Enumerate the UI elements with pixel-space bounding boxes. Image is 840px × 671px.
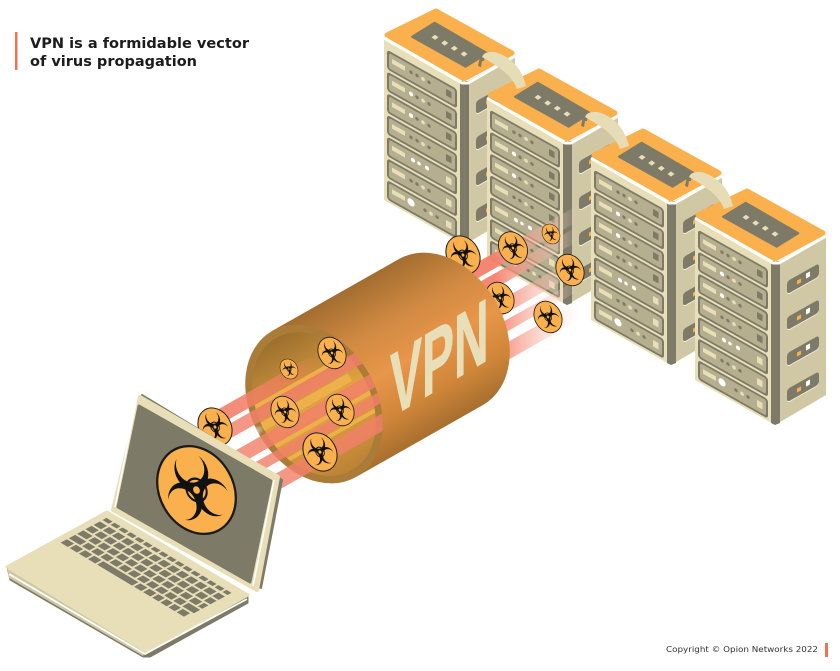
virus disc xyxy=(320,389,360,431)
title: VPN is a formidable vector xyxy=(30,36,250,52)
cable: server 2 to 3 xyxy=(581,112,629,149)
virus disc xyxy=(538,221,564,247)
title bar accent xyxy=(15,32,18,70)
virus disc xyxy=(276,356,302,382)
server 1 xyxy=(384,11,515,245)
screen biohazard icon xyxy=(142,432,251,548)
copyright accent bar xyxy=(825,643,828,657)
tunnel interior xyxy=(252,332,376,476)
white fade at tunnel mouth xyxy=(232,421,268,449)
virus disc leaving the laptop xyxy=(191,402,239,452)
laptop lid xyxy=(113,395,282,590)
beams from the laptop into the tunnel xyxy=(218,354,383,488)
virus disc xyxy=(265,391,305,433)
virus disc xyxy=(439,230,487,280)
virus disc xyxy=(296,427,344,477)
server 3 xyxy=(591,131,722,365)
laptop base xyxy=(7,512,248,657)
keyboard xyxy=(64,519,230,616)
copyright: Copyright © Opion Networks 2022 xyxy=(666,644,818,654)
server 4 xyxy=(695,191,826,425)
laptop xyxy=(7,395,282,657)
virus disc xyxy=(480,277,520,319)
virus disc xyxy=(493,226,533,270)
virus disc xyxy=(550,249,590,291)
VPN label: VPN xyxy=(390,278,489,437)
virus discs inside the tunnel xyxy=(265,332,360,477)
VPN tunnel cylinder xyxy=(245,253,510,483)
beams reaching the servers xyxy=(440,205,578,398)
title: of virus propagation xyxy=(30,54,197,70)
cable: server 1 to 2 xyxy=(478,52,526,89)
tunnel rim xyxy=(245,325,383,483)
tunnel body xyxy=(272,253,510,477)
title xyxy=(30,36,250,70)
virus discs leaving the tunnel xyxy=(439,221,590,338)
amber streaks inside tunnel xyxy=(254,365,376,461)
server 2 xyxy=(487,71,618,305)
virus disc xyxy=(528,296,568,338)
virus disc xyxy=(312,332,352,374)
cable: server 3 to 4 xyxy=(685,172,733,209)
server rack row xyxy=(384,11,826,425)
